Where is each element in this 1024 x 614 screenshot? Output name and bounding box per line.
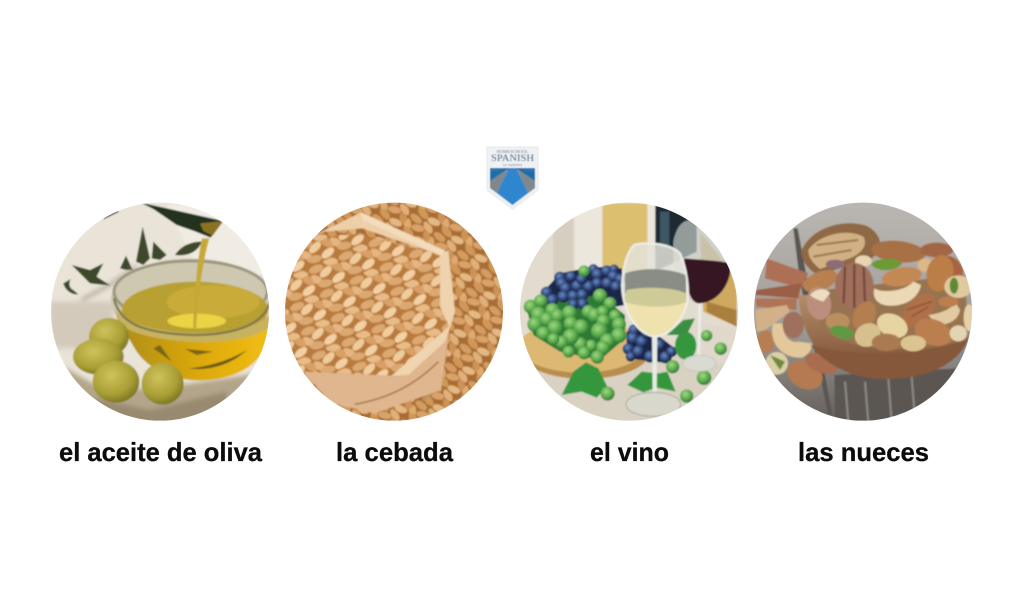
leaves <box>63 227 202 294</box>
bottle <box>655 205 697 272</box>
photo: bowl of nuts <box>754 202 972 421</box>
panel: la cebada <box>285 202 503 462</box>
panel: el aceite de oliva <box>51 202 269 462</box>
nuts in bowl <box>808 275 968 349</box>
logo: Homeschool Spanish Academy shield: ACADEMY <box>502 163 523 167</box>
white wine glass <box>652 335 657 395</box>
logo: Homeschool Spanish Academy shield <box>487 147 538 209</box>
label: el aceite de oliva <box>59 437 263 467</box>
table <box>538 356 724 420</box>
olives <box>89 318 129 355</box>
green grapes <box>524 300 538 314</box>
loose nuts <box>755 305 790 332</box>
bowl <box>798 294 968 358</box>
leaves and loose grapes <box>562 362 607 398</box>
logo: Homeschool Spanish Academy shield: SPANISH <box>491 153 535 163</box>
label: el vino <box>590 437 669 467</box>
photo: barley sack <box>285 202 503 421</box>
sack fold right <box>440 250 455 328</box>
board <box>532 358 646 379</box>
barrel <box>700 232 737 327</box>
bottle <box>140 202 223 238</box>
panel: las nueces <box>754 202 972 462</box>
photo: olive oil <box>51 202 269 421</box>
oil stream <box>193 238 209 328</box>
logo: Homeschool Spanish Academy shield: HOMESCHOOL <box>496 150 529 154</box>
blue grapes bottom <box>628 324 638 333</box>
label: las nueces <box>798 437 929 467</box>
walnut <box>801 223 880 275</box>
photo: wine and grapes <box>520 202 738 421</box>
red wine glass <box>697 302 702 358</box>
sack front <box>303 326 450 413</box>
bowl body <box>120 323 270 380</box>
blue grapes top <box>541 287 553 299</box>
panel: el vino <box>520 202 738 462</box>
sack interior grains <box>282 235 452 377</box>
bowl back <box>110 258 268 316</box>
grape underlays <box>547 266 625 308</box>
label: la cebada <box>336 437 454 467</box>
pecans left <box>765 258 808 288</box>
sack cloth top <box>316 212 439 255</box>
